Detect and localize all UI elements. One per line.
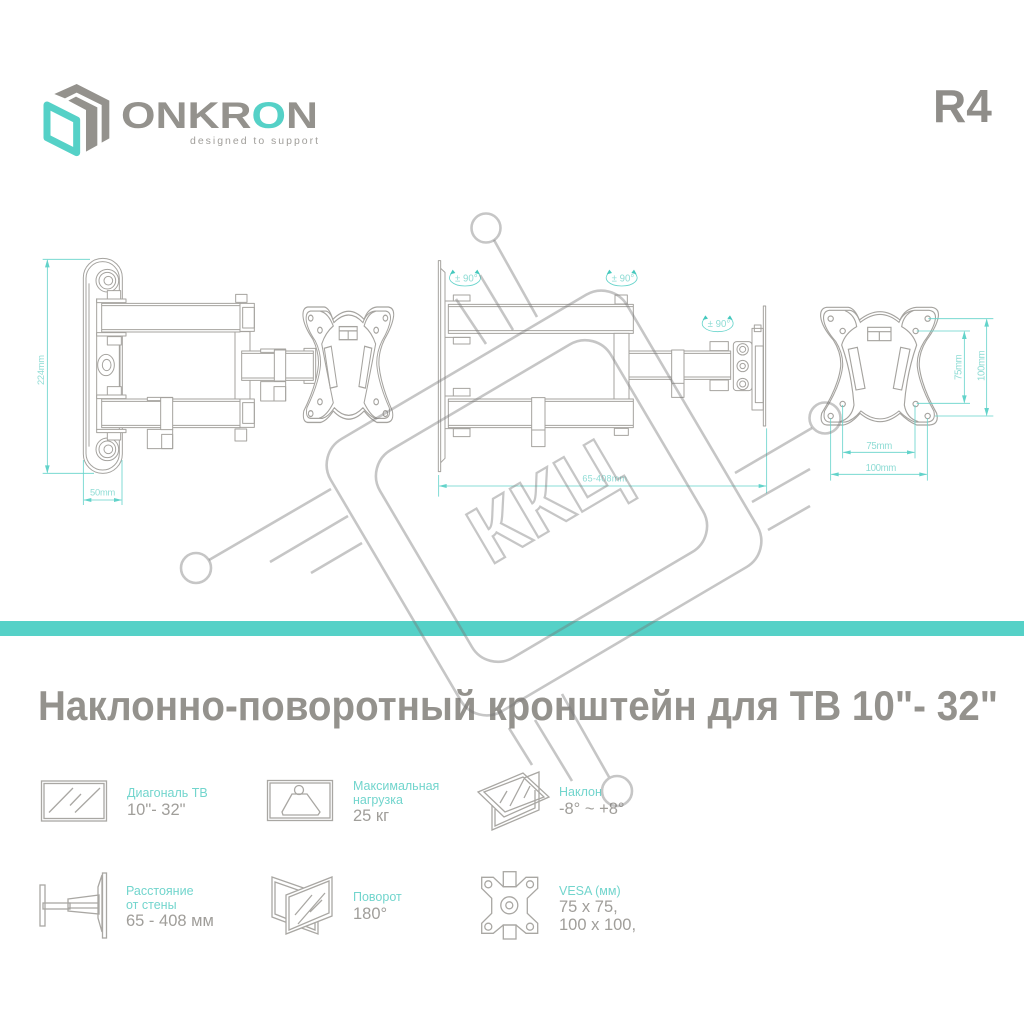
- model label: R4: [933, 80, 992, 132]
- watermark top rays: [456, 214, 537, 344]
- text: max load: [353, 779, 439, 825]
- rotation mark 2: [606, 270, 637, 286]
- rotation mark 1: [450, 270, 480, 286]
- spec: TV diagonal: [42, 781, 208, 821]
- upper arm side: [448, 295, 633, 344]
- dimension: height 224mm and width 50mm: [36, 259, 122, 505]
- icon: bracket side: [40, 873, 106, 938]
- watermark stamp: [181, 214, 840, 806]
- rotation mark 2: ± 90°: [612, 273, 634, 284]
- drawing: VESA plate, tilted view: [303, 307, 394, 422]
- dimensions: VESA 75mm and 100mm: [831, 319, 993, 481]
- text: diagonal: Диагональ ТВ: [127, 786, 208, 800]
- dimensions: VESA 75mm and 100mm: 100mm: [866, 463, 896, 474]
- forearm: [242, 348, 316, 401]
- text: diagonal: 10"- 32": [127, 801, 186, 819]
- dimensions: VESA 75mm and 100mm: 75mm: [866, 441, 892, 452]
- dimension: 65-408mm: [439, 428, 767, 497]
- head joint: [733, 306, 766, 426]
- rotation mark 3: [702, 315, 733, 332]
- dimension: height 224mm and width 50mm: 50mm: [90, 487, 116, 497]
- lower arm side: [448, 388, 633, 447]
- text: max load: нагрузка: [353, 793, 403, 807]
- spec: VESA: [482, 872, 636, 939]
- spec: swivel: [272, 877, 402, 934]
- text: max load: Максимальная: [353, 779, 439, 793]
- dimension: height 224mm and width 50mm: 224mm: [36, 355, 46, 385]
- spec: wall distance: [40, 873, 214, 938]
- text: wall distance: 65 - 408 мм: [126, 912, 214, 930]
- watermark inner frame: [365, 329, 718, 673]
- connecting post and forearm: [614, 333, 731, 399]
- watermark outer frame: [316, 280, 772, 726]
- dimensions: VESA 75mm and 100mm: 100mm: [976, 350, 987, 381]
- dimensions: VESA 75mm and 100mm: 75mm: [954, 354, 965, 380]
- text: VESA: VESA (мм): [559, 884, 621, 898]
- text: VESA: 100 x 100,: [559, 916, 636, 934]
- wall plate: [83, 258, 122, 473]
- icon: swivel screens: [272, 877, 332, 934]
- text: VESA: [559, 884, 636, 934]
- watermark lettering: ККЦ: [453, 421, 639, 582]
- upper arm: [97, 294, 254, 400]
- text: wall distance: [126, 884, 214, 930]
- text: VESA: 75 x 75,: [559, 898, 618, 916]
- text: tilt: Наклон: [559, 785, 602, 799]
- drawing: side view of bracket: [438, 261, 767, 497]
- lower arm: [97, 395, 254, 449]
- logo tagline: designed to support: [190, 135, 318, 147]
- teal divider bar: [0, 621, 1024, 636]
- icon: weight: [268, 780, 332, 820]
- wall plate side: [438, 261, 471, 472]
- rotation mark 1: ± 90°: [455, 273, 478, 284]
- text: wall distance: Расстояние: [126, 884, 194, 898]
- text: swivel: 180°: [353, 905, 387, 923]
- text: diagonal: [127, 786, 208, 819]
- spec: max load: [268, 779, 439, 825]
- watermark left rays: [181, 489, 362, 583]
- text: tilt: [559, 785, 624, 818]
- watermark bottom rays: [509, 694, 632, 806]
- text: swivel: Поворот: [353, 890, 402, 904]
- drawing: front view of bracket: [83, 258, 316, 473]
- logo wordmark: ONKR ON: [121, 95, 318, 136]
- rotation mark 3: ± 90°: [708, 319, 730, 330]
- watermark right rays: [735, 402, 840, 530]
- drawing: VESA plate, front view: [821, 307, 938, 425]
- logo: [47, 84, 318, 153]
- spec: tilt: [478, 772, 624, 830]
- text: swivel: [353, 890, 402, 923]
- logo mark: box icon: [47, 84, 109, 153]
- text: tilt: -8° ~ +8°: [559, 800, 624, 818]
- dimension: 65-408mm: 65-408mm: [582, 474, 627, 484]
- icon: tilted screen: [478, 772, 549, 830]
- text: wall distance: от стены: [126, 898, 177, 912]
- icon: TV screen: [42, 781, 106, 821]
- icon: VESA plate: [482, 872, 538, 939]
- text: max load: 25 кг: [353, 807, 389, 825]
